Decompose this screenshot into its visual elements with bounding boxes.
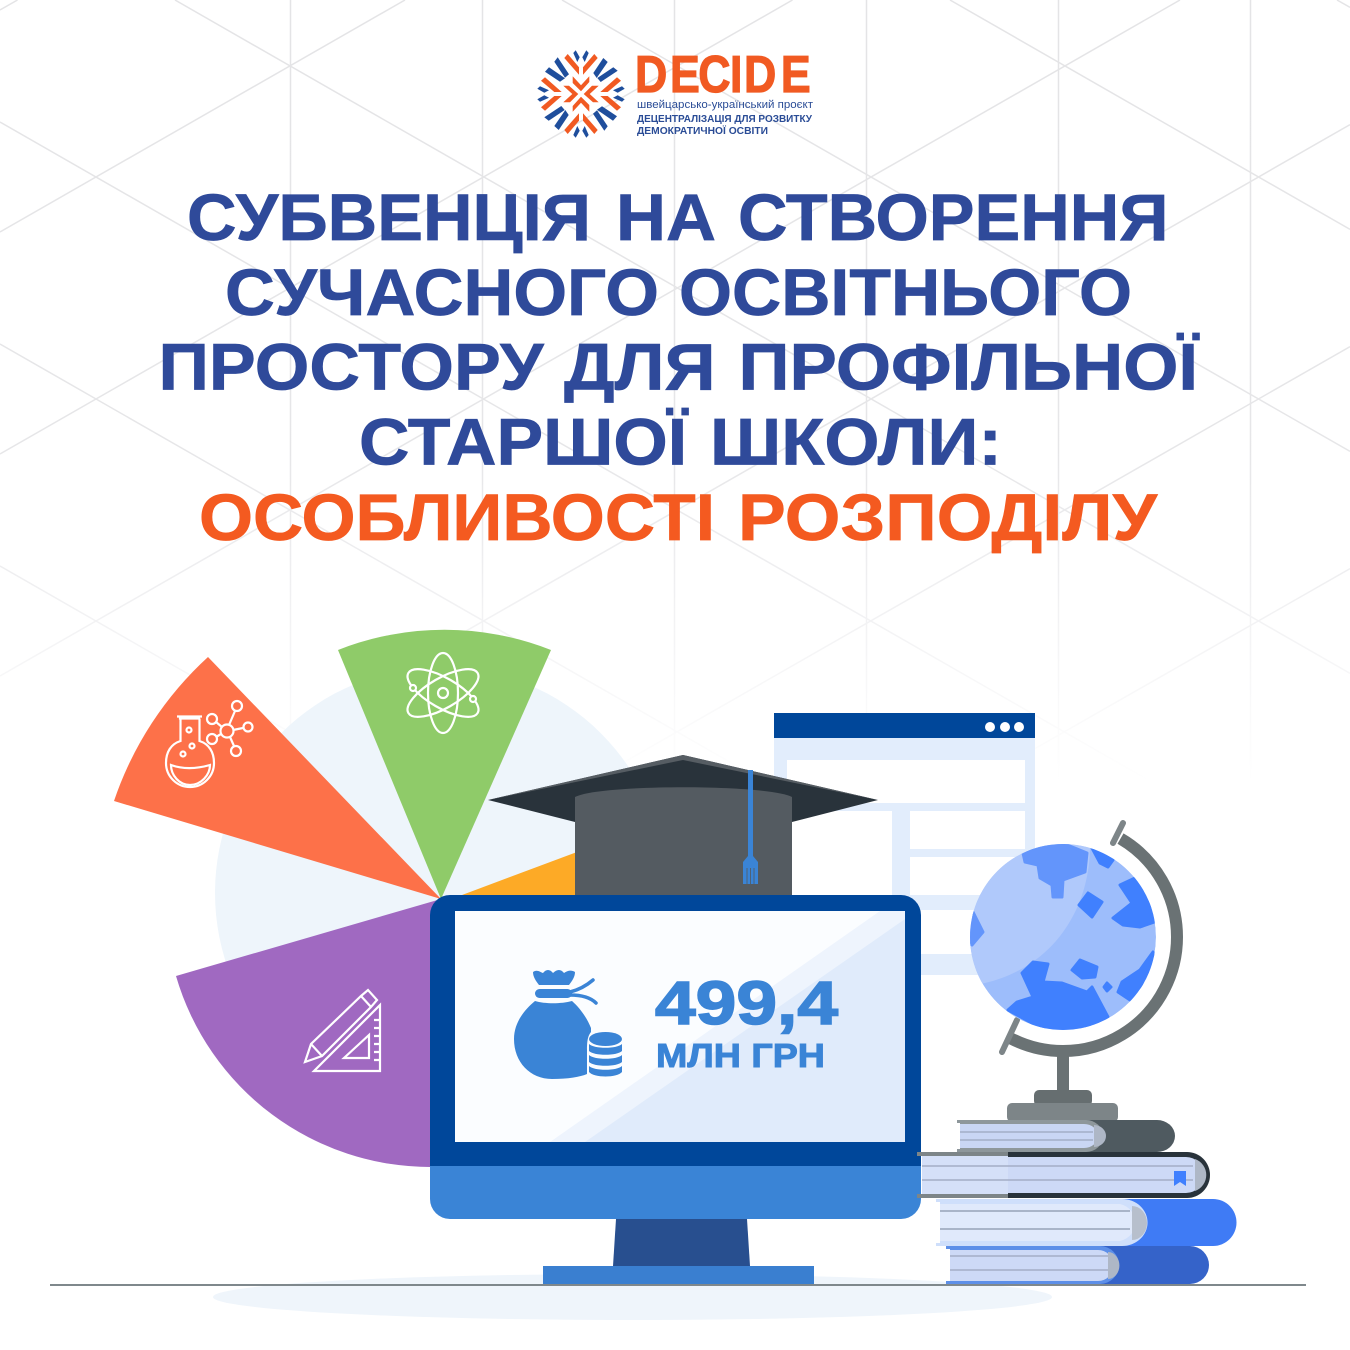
- title: СТАРШОЇ: [359, 404, 689, 478]
- monitor screen: [455, 911, 905, 1142]
- monitor stand: [613, 1219, 750, 1266]
- amount: 499,4: [655, 969, 838, 1037]
- title accent line: РОЗПОДІЛУ: [738, 480, 1158, 554]
- wedge: orange chemistry: [114, 657, 441, 899]
- title: ОСВІТНЬОГО: [679, 255, 1132, 329]
- title: СУБВЕНЦІЯ: [187, 180, 591, 254]
- logo subtitle: ДЕМОКРАТИЧНОЇ ОСВІТИ: [637, 124, 768, 137]
- cap tassel: [743, 770, 758, 884]
- logo wordmark: DECIDE: [635, 46, 811, 104]
- pie chart: [114, 630, 667, 1167]
- title: [158, 180, 1200, 554]
- book 3: [936, 1199, 1236, 1246]
- browser window panel: [774, 713, 1035, 975]
- logo subtitle: ДЕЦЕНТРАЛІЗАЦІЯ ДЛЯ РОЗВИТКУ: [637, 113, 812, 125]
- monitor chin: [430, 1166, 921, 1219]
- globe sphere: [970, 844, 1156, 1030]
- stack of books: [917, 1120, 1236, 1284]
- title accent line: ОСОБЛИВОСТІ: [199, 480, 715, 554]
- globe stand: [1002, 823, 1177, 1052]
- wedge: yellow: [462, 852, 577, 896]
- amount unit: МЛН ГРН: [656, 1038, 825, 1075]
- floor shadow: [213, 1274, 1052, 1320]
- bookmark: [1174, 1171, 1186, 1186]
- title accent line: [199, 480, 1158, 554]
- title: ПРОФІЛЬНОЇ: [738, 330, 1200, 404]
- wedge: green physics: [338, 630, 551, 899]
- logo: DECIDE: [537, 46, 813, 138]
- title: НА: [616, 180, 716, 254]
- monitor: [430, 895, 921, 1284]
- wedge: purple maths: [176, 899, 441, 1167]
- ground line: [50, 1284, 1306, 1286]
- icon: pencil and set square: [305, 990, 380, 1071]
- title: СУЧАСНОГО: [225, 255, 659, 329]
- window header bar: [774, 713, 1035, 738]
- book 2: [917, 1152, 1210, 1198]
- title: ДЛЯ: [564, 330, 716, 404]
- globe: [950, 823, 1177, 1122]
- icon: logo snowflake: [537, 50, 625, 138]
- icon: money bag with coins: [514, 970, 622, 1079]
- pie background circle: [215, 667, 667, 1119]
- icon: atom: [401, 653, 485, 733]
- title: ПРОСТОРУ: [158, 330, 544, 404]
- logo subtitle: швейцарсько-український проєкт: [637, 99, 813, 111]
- title: СТВОРЕННЯ: [738, 180, 1168, 254]
- icon: flask and molecule: [166, 701, 252, 787]
- book 1: [957, 1120, 1175, 1152]
- title: ШКОЛИ:: [710, 404, 1002, 478]
- graduation cap: [488, 755, 878, 895]
- logo subtitle: [637, 99, 813, 137]
- book 4: [946, 1246, 1209, 1284]
